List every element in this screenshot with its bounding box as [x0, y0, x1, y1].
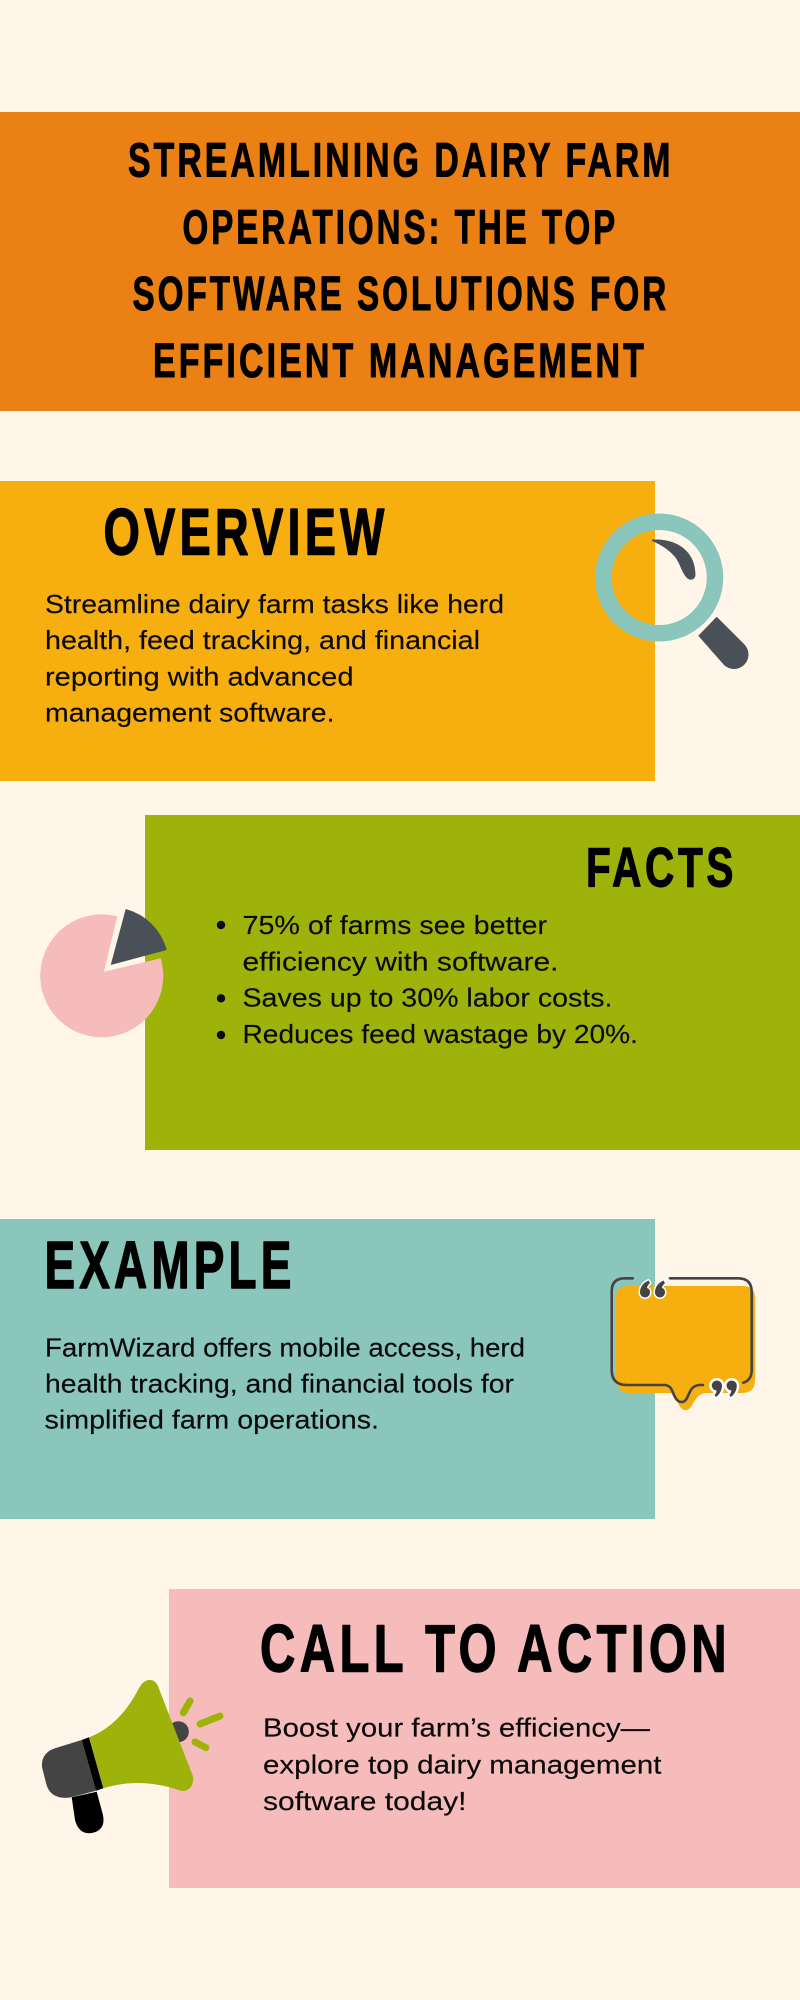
- example text: [44, 1333, 525, 1434]
- icon: megaphone: [42, 1680, 220, 1833]
- facts list: [217, 910, 638, 1049]
- panel: facts: [40, 815, 800, 1150]
- overview text: [45, 589, 504, 728]
- heading: overview: OVERVIEW: [104, 494, 388, 568]
- call to action text: [263, 1713, 662, 1816]
- panel: example: [0, 1219, 755, 1519]
- title banner: [0, 112, 800, 411]
- call to action text: software today!: [263, 1786, 466, 1816]
- call to action text: Boost your farm’s efficiency—: [263, 1713, 650, 1743]
- panel: overview: [0, 481, 748, 781]
- overview text: Streamline dairy farm tasks like herd: [45, 589, 504, 619]
- icon: pie chart: [40, 909, 167, 1037]
- heading: example: EXAMPLE: [44, 1228, 296, 1303]
- example text: health tracking, and financial tools for: [45, 1368, 514, 1398]
- title: [128, 134, 674, 388]
- heading: facts: FACTS: [586, 836, 737, 898]
- icon: magnifying glass: [603, 522, 748, 669]
- overview text: management software.: [45, 698, 334, 728]
- panel: call to action: [42, 1589, 800, 1888]
- example text: simplified farm operations.: [44, 1404, 379, 1434]
- overview text: reporting with advanced: [45, 662, 354, 692]
- example text: FarmWizard offers mobile access, herd: [45, 1333, 525, 1363]
- facts list: Saves up to 30% labor costs.: [242, 983, 612, 1013]
- icon: speech bubble: [612, 1278, 755, 1410]
- facts list: Reduces feed wastage by 20%.: [242, 1019, 638, 1049]
- overview text: health, feed tracking, and financial: [45, 625, 480, 655]
- call to action text: explore top dairy management: [263, 1749, 662, 1779]
- facts list: efficiency with software.: [242, 946, 558, 976]
- facts list: 75% of farms see better: [242, 910, 547, 940]
